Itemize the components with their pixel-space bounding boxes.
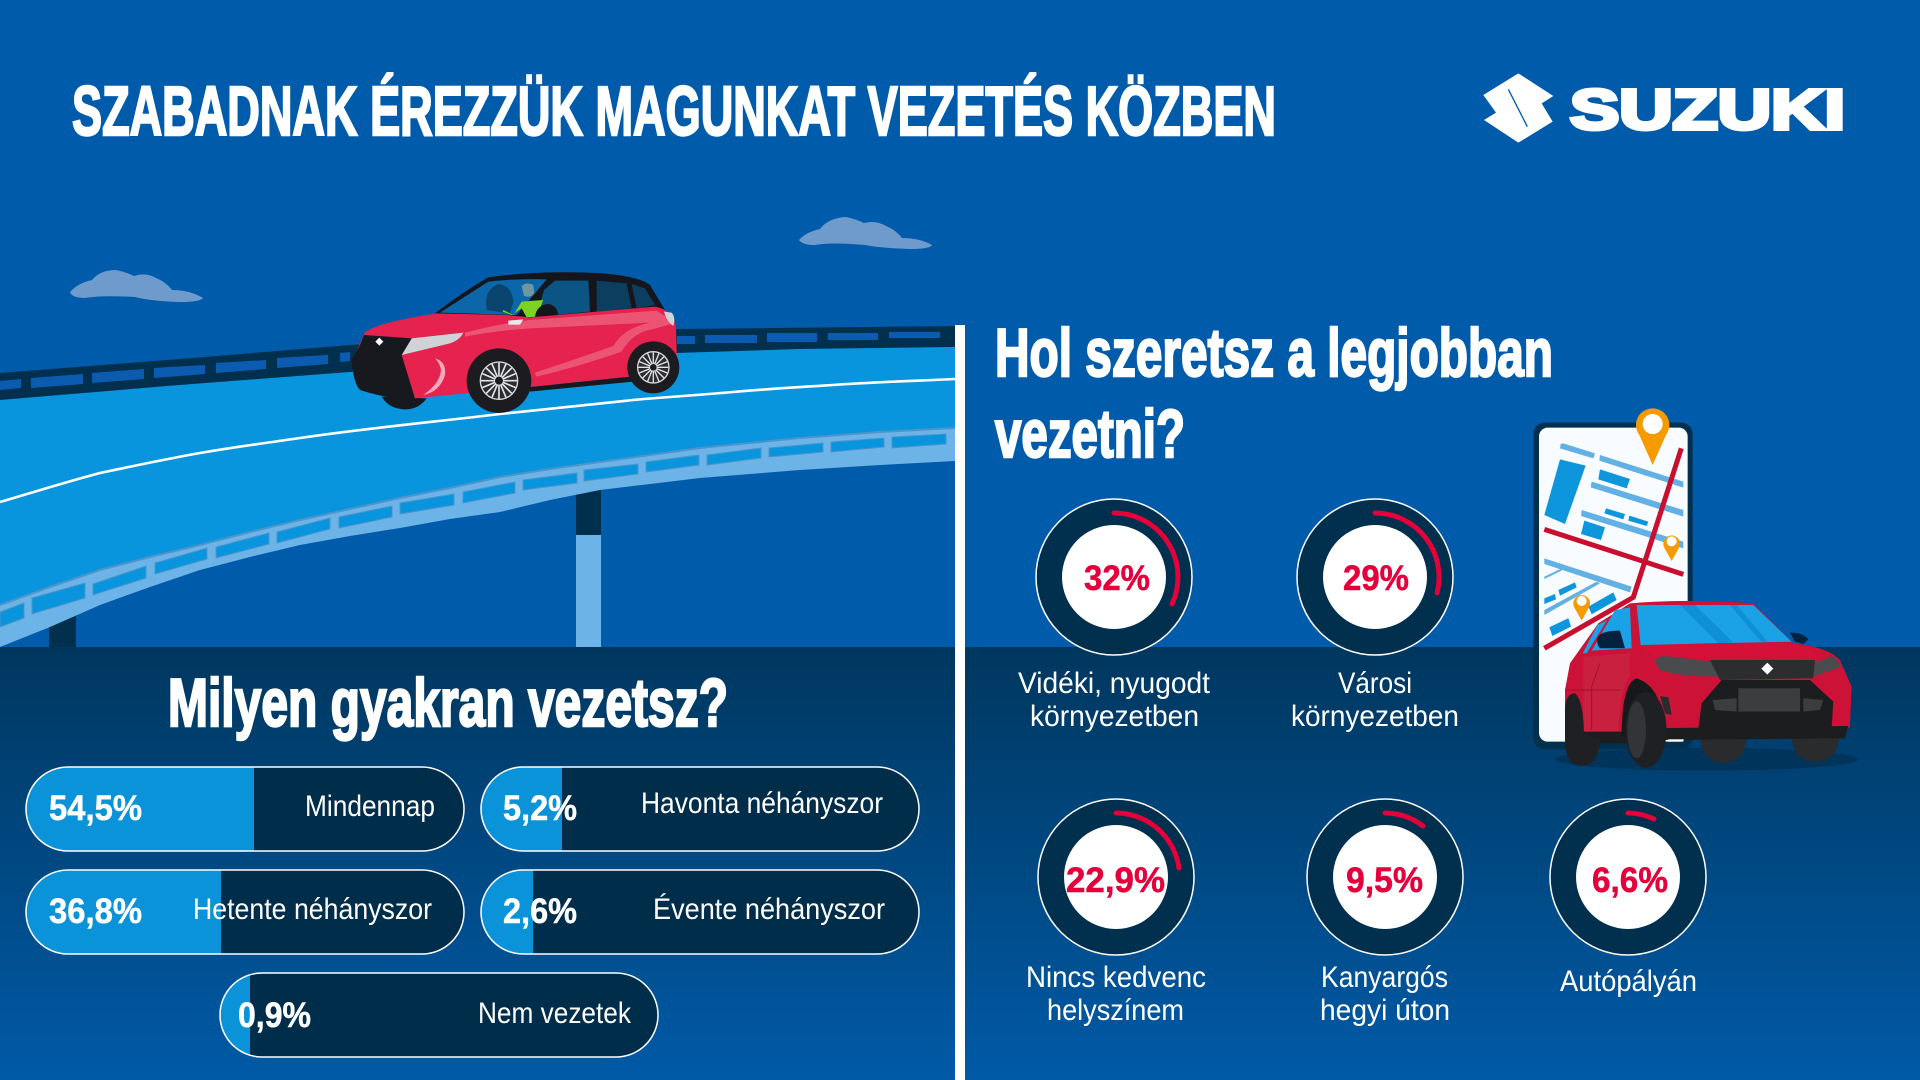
lower railing openings bbox=[0, 434, 946, 627]
cloud left bbox=[70, 270, 203, 302]
heading: how often: Milyen gyakran vezetsz? bbox=[168, 665, 728, 741]
cloud right bbox=[799, 217, 932, 249]
sill bbox=[527, 377, 633, 392]
panel: frequency bars bbox=[26, 767, 919, 1057]
front wheel arch bbox=[1622, 678, 1658, 740]
donut: 32% bbox=[1036, 499, 1192, 655]
bar: 0,9% never: 0,9% bbox=[238, 996, 311, 1035]
bar: 0,9% never bbox=[220, 973, 658, 1057]
ground shadow bbox=[1555, 748, 1858, 771]
tail light bbox=[664, 312, 674, 326]
donut: 6,6% bbox=[1550, 799, 1706, 955]
donut: 9,5% bbox=[1307, 799, 1463, 955]
car: red SUV on bridge bbox=[352, 272, 679, 413]
bar: 5,2% monthly bbox=[481, 767, 919, 851]
bumper light bbox=[423, 358, 445, 395]
label: urban: környezetben bbox=[1291, 700, 1459, 733]
donut: 29%: 29% bbox=[1343, 559, 1409, 598]
background ground band bbox=[0, 647, 1920, 1080]
wordmark: SUZUKI bbox=[1570, 78, 1845, 142]
bar: 2,6% yearly: Évente néhányszor bbox=[653, 893, 885, 926]
label: motorway: Autópályán bbox=[1560, 965, 1697, 998]
rear left tyre bbox=[1565, 693, 1600, 766]
label: mountain road: hegyi úton bbox=[1320, 994, 1450, 1027]
grille and bumper bbox=[352, 335, 415, 400]
roof and greenhouse bbox=[435, 272, 665, 320]
emblem bbox=[1761, 663, 1773, 675]
side intake bbox=[1660, 696, 1672, 715]
heading: where do you like driving: Hol szeretsz a legjobban bbox=[995, 315, 1553, 391]
emblem bbox=[375, 338, 383, 346]
side mirror base bbox=[508, 319, 523, 325]
label: mountain road: Kanyargós bbox=[1321, 961, 1448, 994]
pillar centre bbox=[576, 480, 601, 647]
windscreen bbox=[1637, 605, 1792, 645]
pin medium centre bbox=[1667, 536, 1677, 546]
windscreen bbox=[440, 279, 547, 315]
label: urban bbox=[1291, 667, 1459, 733]
door panel bbox=[1583, 653, 1630, 733]
bar: 2,6% yearly: 2,6% bbox=[503, 892, 577, 931]
divider bbox=[955, 325, 965, 1080]
heading: where do you like driving: vezetni? bbox=[995, 396, 1185, 472]
donut: 32%: 32% bbox=[1084, 559, 1150, 598]
front tyres bbox=[1700, 733, 1840, 763]
bar: 5,2% monthly: 5,2% bbox=[503, 789, 577, 828]
car body bbox=[1565, 601, 1852, 740]
front left tyre bbox=[1625, 692, 1667, 768]
pin large centre bbox=[1643, 414, 1663, 434]
upper railing openings bbox=[0, 332, 940, 390]
pin small bbox=[1573, 595, 1590, 621]
body highlight bbox=[465, 311, 674, 377]
hood bbox=[1640, 643, 1822, 657]
bar: 54,5% every day: 54,5% bbox=[49, 789, 142, 828]
rear wheel bbox=[627, 341, 679, 393]
front wheel bbox=[467, 348, 531, 413]
car body bbox=[353, 307, 677, 398]
background sky bbox=[0, 0, 1920, 647]
illustration: phone map and car bbox=[1533, 408, 1858, 771]
route bbox=[1544, 448, 1683, 648]
bar: 54,5% every day bbox=[26, 767, 464, 851]
label: no favourite bbox=[1026, 961, 1206, 1027]
lower grille bbox=[1698, 680, 1833, 728]
pin medium bbox=[1663, 535, 1680, 561]
bar: 5,2% monthly: Havonta néhányszor bbox=[641, 787, 883, 820]
map streets bbox=[1544, 443, 1683, 615]
logo: Suzuki bbox=[1483, 73, 1845, 143]
upper grille bbox=[1710, 660, 1815, 680]
map blocks bbox=[1544, 459, 1648, 636]
headlight right bbox=[1813, 656, 1842, 677]
bar: 54,5% every day: Mindennap bbox=[305, 790, 435, 823]
side windows bbox=[537, 281, 590, 317]
headlight left bbox=[1655, 656, 1720, 677]
door line bbox=[1565, 663, 1620, 730]
label: mountain road bbox=[1320, 961, 1450, 1027]
road surface bbox=[0, 347, 955, 609]
donut: 9,5%: 9,5% bbox=[1346, 861, 1423, 900]
donut: 6,6%: 6,6% bbox=[1592, 861, 1668, 900]
side windows bbox=[1583, 607, 1632, 653]
upper railing bbox=[0, 326, 955, 400]
far front wheel bbox=[382, 397, 427, 409]
label: countryside: környezetben bbox=[1030, 700, 1199, 733]
licence glint bbox=[1668, 739, 1683, 742]
bar: 36,8% weekly: Hetente néhányszor bbox=[193, 893, 432, 926]
label: urban: Városi bbox=[1338, 667, 1412, 700]
label: no favourite: Nincs kedvenc bbox=[1026, 961, 1206, 994]
bar: 0,9% never: Nem vezetek bbox=[478, 997, 632, 1030]
pin large bbox=[1636, 408, 1669, 465]
bumper bbox=[1583, 726, 1848, 743]
headlight bbox=[402, 333, 463, 355]
windscreen reflection bbox=[1680, 605, 1768, 643]
bar: 2,6% yearly bbox=[481, 870, 919, 954]
mirrors bbox=[1597, 631, 1808, 648]
donut: 22,9% bbox=[1038, 799, 1194, 955]
heading: where do you like driving bbox=[995, 315, 1553, 472]
label: no favourite: helyszínem bbox=[1047, 994, 1184, 1027]
road lane line bbox=[0, 379, 955, 502]
pillar left bbox=[49, 610, 76, 647]
label: countryside bbox=[1018, 667, 1211, 733]
bridge bbox=[0, 326, 955, 647]
front seat silhouette bbox=[486, 284, 513, 313]
lower grille insert bbox=[1713, 688, 1823, 712]
phone bbox=[1533, 423, 1693, 749]
lower railing top edge bbox=[0, 428, 955, 605]
donut: 29% bbox=[1297, 499, 1453, 655]
driver bbox=[503, 284, 558, 317]
icon: Suzuki S mark bbox=[1483, 73, 1553, 143]
bar: 36,8% weekly bbox=[26, 870, 464, 954]
bar: 36,8% weekly: 36,8% bbox=[49, 892, 142, 931]
lower railing beam bbox=[0, 428, 955, 647]
donut: 22,9%: 22,9% bbox=[1066, 861, 1165, 900]
rear windows bbox=[597, 281, 655, 312]
label: countryside: Vidéki, nyugodt bbox=[1018, 667, 1211, 700]
pin small centre bbox=[1577, 596, 1587, 606]
title: SZABADNAK ÉREZZÜK MAGUNKAT VEZETÉS KÖZBEN bbox=[72, 72, 1276, 150]
